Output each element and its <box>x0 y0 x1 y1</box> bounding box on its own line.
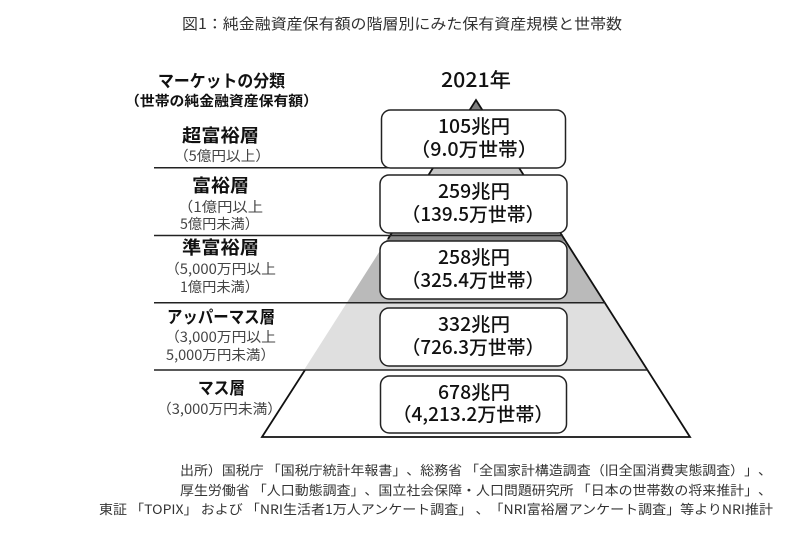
tier: wealthy value box: （139.5万世帯） <box>402 200 544 227</box>
tier: mass value box <box>380 376 566 433</box>
tier: wealthy value box: 259兆円 <box>438 177 510 204</box>
tier: mass label: （3,000万円未満） <box>157 399 282 419</box>
heading: year: 2021年 <box>441 64 511 93</box>
tier: upper mass value box <box>380 308 567 366</box>
tier: semi-wealthy label <box>165 234 276 297</box>
tier: wealthy value box <box>380 175 567 233</box>
tier: wealthy label: （1億円以上 <box>178 197 263 217</box>
tier: semi-wealthy label: （5,000万円以上 <box>165 259 276 279</box>
tier: mass label <box>157 374 282 419</box>
tier: upper mass label: 5,000万円未満） <box>166 345 275 365</box>
tier: upper mass label <box>165 303 276 365</box>
tier: mass value box: （4,213.2万世帯） <box>392 400 554 427</box>
heading: market classification: （世帯の純金融資産保有額） <box>125 91 318 111</box>
tier: mass value box: 678兆円 <box>438 378 510 405</box>
tier: ultra wealthy label <box>174 122 270 166</box>
pyramid chart <box>154 100 690 437</box>
tier: semi-wealthy value box: 258兆円 <box>438 243 510 270</box>
heading: market classification: マーケットの分類 <box>158 67 285 92</box>
source note: 出所）国税庁 「国税庁統計年報書」、総務省 「全国家計構造調査（旧全国消費実態調査）」、 <box>180 460 772 479</box>
tier: upper mass label: （3,000万円以上 <box>165 327 276 347</box>
tier: wealthy label <box>178 172 263 234</box>
source note: 厚生労働省 「人口動態調査」、国立社会保障・人口問題研究所 「日本の世帯数の将来推計」、 <box>180 480 772 499</box>
tier: upper mass value box: 332兆円 <box>438 310 510 337</box>
heading: market classification <box>125 67 318 111</box>
tier: wealthy label: 5億円未満） <box>180 214 259 234</box>
tier: wealthy label: 富裕層 <box>192 172 249 198</box>
tier: upper mass value box: （726.3万世帯） <box>402 333 544 360</box>
source note <box>99 460 773 518</box>
tier: upper mass label: アッパーマス層 <box>167 303 275 328</box>
tier: semi-wealthy label: 準富裕層 <box>182 234 259 260</box>
tier: mass label: マス層 <box>198 374 245 399</box>
title: 図1：純金融資産保有額の階層別にみた保有資産規模と世帯数 <box>182 13 622 34</box>
tier: ultra wealthy value box <box>382 110 566 168</box>
tier: semi-wealthy label: 1億円未満） <box>180 277 259 297</box>
tier: ultra wealthy label: 超富裕層 <box>182 122 259 148</box>
tier: ultra wealthy value box: （9.0万世帯） <box>410 135 538 162</box>
tier: ultra wealthy label: （5億円以上） <box>174 146 270 166</box>
tier: semi-wealthy value box: （325.4万世帯） <box>402 266 544 293</box>
tier: semi-wealthy value box <box>380 241 567 299</box>
source note: 東証 「TOPIX」 および 「NRI生活者1万人アンケート調査」 、「NRI富裕層アンケート調査」等よりNRI推計 <box>99 499 773 518</box>
tier: ultra wealthy value box: 105兆円 <box>438 112 510 139</box>
